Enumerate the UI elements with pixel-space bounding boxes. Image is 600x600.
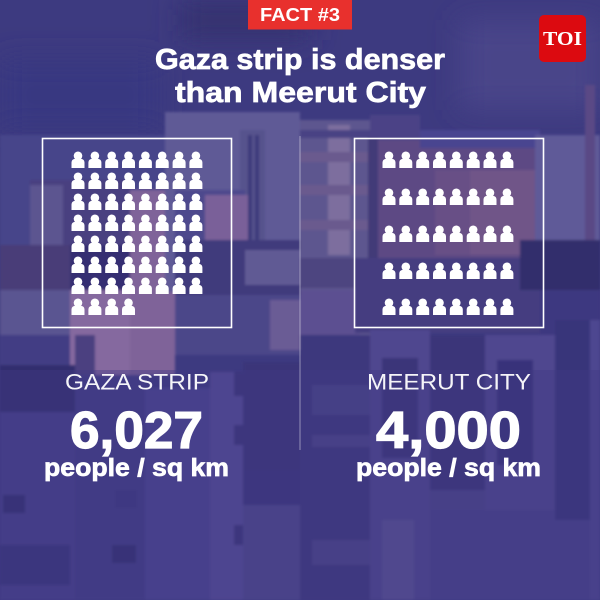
stat: Gaza strip: 6,027	[70, 402, 203, 460]
title: than Meerut City	[175, 77, 426, 109]
stat: Meerut City: 4,000	[376, 402, 521, 460]
stat: Gaza strip: GAZA STRIP	[65, 370, 209, 394]
stat: Meerut City	[356, 370, 541, 482]
stat: Gaza strip	[44, 370, 229, 482]
panel: Meerut City people grid	[354, 138, 544, 328]
stat: Gaza strip: people / sq km	[44, 454, 229, 482]
panel: Gaza strip people grid	[42, 138, 232, 328]
title: Gaza strip is denser	[155, 44, 445, 76]
logo: TOI: TOI	[543, 28, 582, 50]
badge: FACT #3	[248, 0, 352, 30]
stat: Meerut City: MEERUT CITY	[367, 370, 531, 394]
title	[155, 44, 445, 109]
badge: FACT #3: FACT #3	[260, 5, 340, 25]
stat: Meerut City: people / sq km	[356, 454, 541, 482]
logo: TOI	[539, 15, 586, 62]
